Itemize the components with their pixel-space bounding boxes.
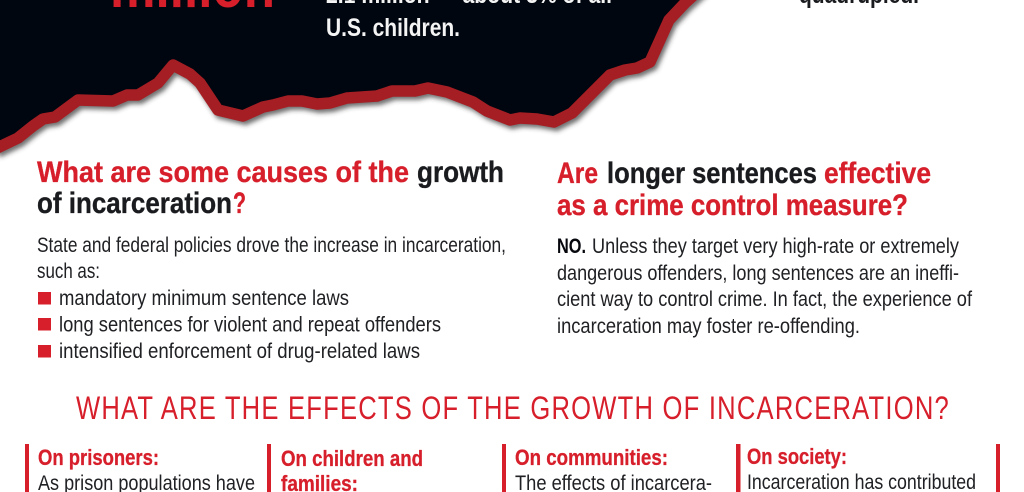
list: policy causes: mandatory minimum sentence laws	[59, 287, 349, 310]
heading: causes of growth: What are some causes of the	[37, 156, 409, 189]
panel: on communities	[502, 444, 712, 492]
text block: causes intro: State and federal policies drove the increase in incarceration,	[37, 234, 506, 257]
heading: effects of growth: WHAT ARE THE EFFECTS OF THE GROWTH OF INCARCERATION?	[76, 391, 949, 427]
text block: sentences answer: NO.	[557, 235, 586, 258]
list: policy causes: intensified enforcement of drug-related laws	[59, 340, 420, 363]
panel: on society: On society:	[747, 444, 847, 469]
panel edge: right rule	[996, 444, 1000, 492]
panel: on children and families: On children and	[281, 446, 423, 471]
heading: longer sentences: as a crime control measure?	[557, 189, 908, 222]
text block: sentences answer: Unless they target very high-rate or extremely	[592, 235, 959, 258]
heading: causes of growth: of incarceration	[37, 187, 232, 220]
heading: causes of growth: growth	[417, 156, 504, 189]
text block: sentences answer: dangerous offenders, long sentences are an ineffi-	[557, 262, 959, 285]
heading: longer sentences	[557, 157, 931, 222]
text block: sentences answer	[557, 235, 972, 338]
panel: on prisoners	[25, 444, 255, 492]
heading: causes of growth	[37, 156, 504, 220]
children statistic text: U.S. children.	[326, 14, 460, 42]
text block: causes intro: such as:	[37, 260, 100, 283]
panel: on prisoners: On prisoners:	[38, 445, 159, 470]
children statistic text	[326, 0, 612, 42]
chart: black area with red trend line	[0, 0, 708, 152]
heading: longer sentences: Are	[557, 157, 598, 190]
heading: longer sentences: longer sentences	[607, 157, 817, 190]
text block: causes intro	[37, 234, 506, 283]
list: policy causes: long sentences for violent and repeat offenders	[59, 314, 441, 336]
text block: sentences answer: incarceration may foster re-offending.	[557, 315, 860, 338]
heading: longer sentences: effective	[824, 157, 931, 190]
heading: causes of growth: ?	[233, 187, 246, 220]
panel: on children and families	[267, 444, 423, 492]
panel: on communities: On communities:	[515, 445, 668, 470]
text block: sentences answer: cient way to control crime. In fact, the experience of	[557, 288, 972, 311]
list: policy causes	[38, 287, 441, 363]
panel: on society	[736, 444, 976, 492]
